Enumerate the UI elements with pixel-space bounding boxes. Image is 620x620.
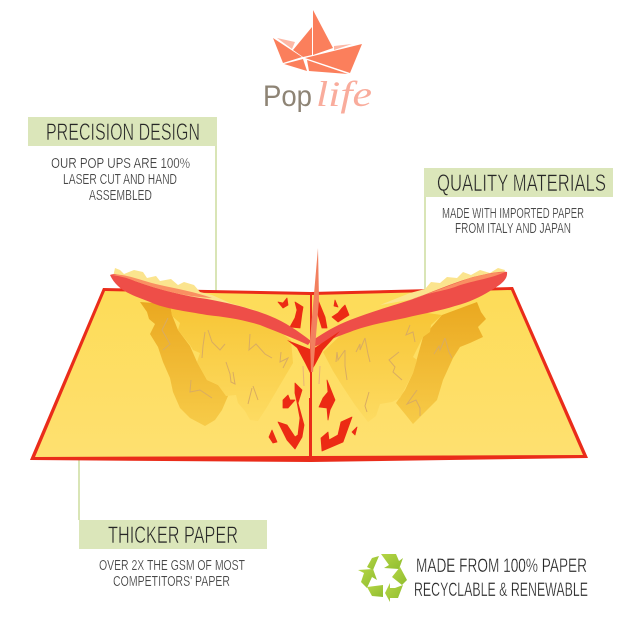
panel: thicker paper <box>79 520 267 590</box>
heading: THICKER PAPER <box>108 522 238 549</box>
pop-up card illustration <box>30 248 588 462</box>
centre body <box>287 331 340 373</box>
icon: recycling arrows <box>358 554 407 602</box>
panel: precision design <box>28 117 217 204</box>
body text: ASSEMBLED <box>89 187 152 204</box>
body text <box>99 557 245 590</box>
heading band <box>424 168 613 197</box>
heading band <box>79 520 267 549</box>
connector lines <box>78 146 426 520</box>
right wing panels <box>323 302 486 424</box>
left wing shadow layer <box>140 302 228 426</box>
flame crest: right wing <box>380 268 505 305</box>
right wing band <box>313 272 507 347</box>
right wing peach strip <box>408 272 505 301</box>
left wing peach strip <box>112 275 212 298</box>
panel: quality materials <box>424 168 613 237</box>
left wing band <box>110 274 311 345</box>
body text <box>442 205 584 237</box>
hanging struts <box>303 366 320 386</box>
body text: OUR POP UPS ARE 100% <box>51 155 190 172</box>
wordmark life: life <box>316 74 372 114</box>
left wing front layer <box>170 304 293 421</box>
flame cut-outs <box>269 298 357 451</box>
body text: OVER 2X THE GSM OF MOST <box>99 557 245 574</box>
left wing panels <box>140 302 293 426</box>
flame crest: left wing <box>113 268 258 311</box>
body text: COMPETITORS' PAPER <box>113 573 230 590</box>
text: recyclable statement <box>414 555 588 601</box>
centre fold <box>309 398 312 458</box>
body text <box>51 155 190 204</box>
left wing vein lines <box>162 318 288 404</box>
icon: origami boat <box>273 10 362 74</box>
right wing vein lines <box>336 325 452 416</box>
body text: LASER CUT AND HAND <box>63 171 177 188</box>
spire <box>310 248 319 372</box>
heading: PRECISION DESIGN <box>46 119 200 146</box>
card base <box>30 287 588 462</box>
right wing shadow layer <box>396 302 486 424</box>
wordmark Pop: Pop <box>263 80 312 113</box>
heading band <box>28 117 217 146</box>
right wing front layer <box>323 312 442 422</box>
logo: Pop life <box>263 10 372 114</box>
